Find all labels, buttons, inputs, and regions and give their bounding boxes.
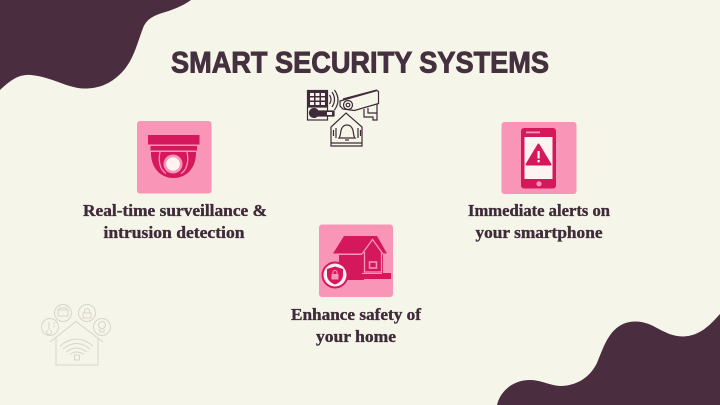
icon: house with bell	[331, 113, 362, 146]
icon: keypad lock	[308, 90, 338, 120]
blob: bottom-right corner	[497, 314, 720, 405]
text: surveillance	[83, 201, 267, 242]
text: home safety: your home	[316, 327, 396, 346]
blob: top-left corner	[0, 0, 191, 90]
text: home safety: Enhance safety of	[291, 305, 422, 324]
icon tile: pink background	[319, 224, 393, 297]
title: SMART SECURITY SYSTEMS	[171, 46, 549, 80]
panel: home safety	[319, 224, 393, 297]
text: home safety	[291, 305, 422, 346]
icon: smartphone alert	[521, 128, 556, 188]
panel: alerts	[502, 122, 576, 194]
icon: dome camera	[148, 135, 200, 178]
icon tile: pink background	[137, 121, 212, 194]
icon tile: pink background	[502, 122, 576, 194]
icon: security devices	[308, 90, 378, 146]
text: alerts: Immediate alerts on	[468, 201, 610, 220]
icon: smart home wifi	[42, 304, 110, 365]
text: alerts: your smartphone	[476, 223, 602, 242]
icon: house with shield badge	[322, 236, 391, 288]
panel: surveillance	[137, 121, 212, 194]
icon: cctv camera	[340, 90, 378, 120]
text: alerts	[468, 201, 610, 242]
text: surveillance: Real-time surveillance &	[83, 201, 267, 220]
text: surveillance: intrusion detection	[104, 223, 244, 242]
